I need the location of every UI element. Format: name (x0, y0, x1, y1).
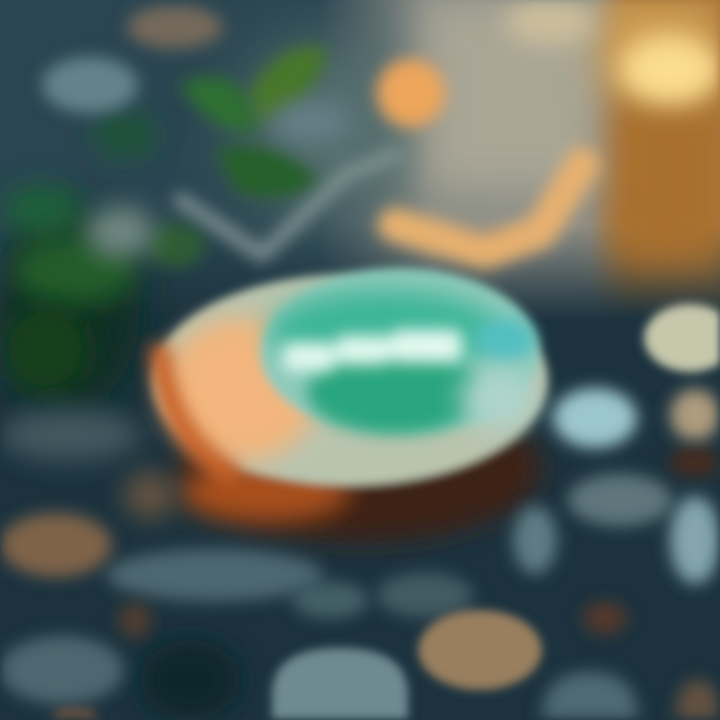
warm glow and candle, top right (127, 0, 720, 265)
coins, right side (513, 304, 720, 720)
pale bokeh, top left (42, 57, 350, 258)
green inner disc (260, 268, 540, 436)
glowing rising line (180, 155, 582, 255)
background haze (240, 40, 420, 220)
blurred white marks on disc (283, 330, 462, 371)
plant leaves (0, 47, 328, 410)
orange bokeh dot (377, 59, 445, 127)
central bowl (152, 268, 548, 542)
coins, bottom and left (0, 409, 542, 720)
